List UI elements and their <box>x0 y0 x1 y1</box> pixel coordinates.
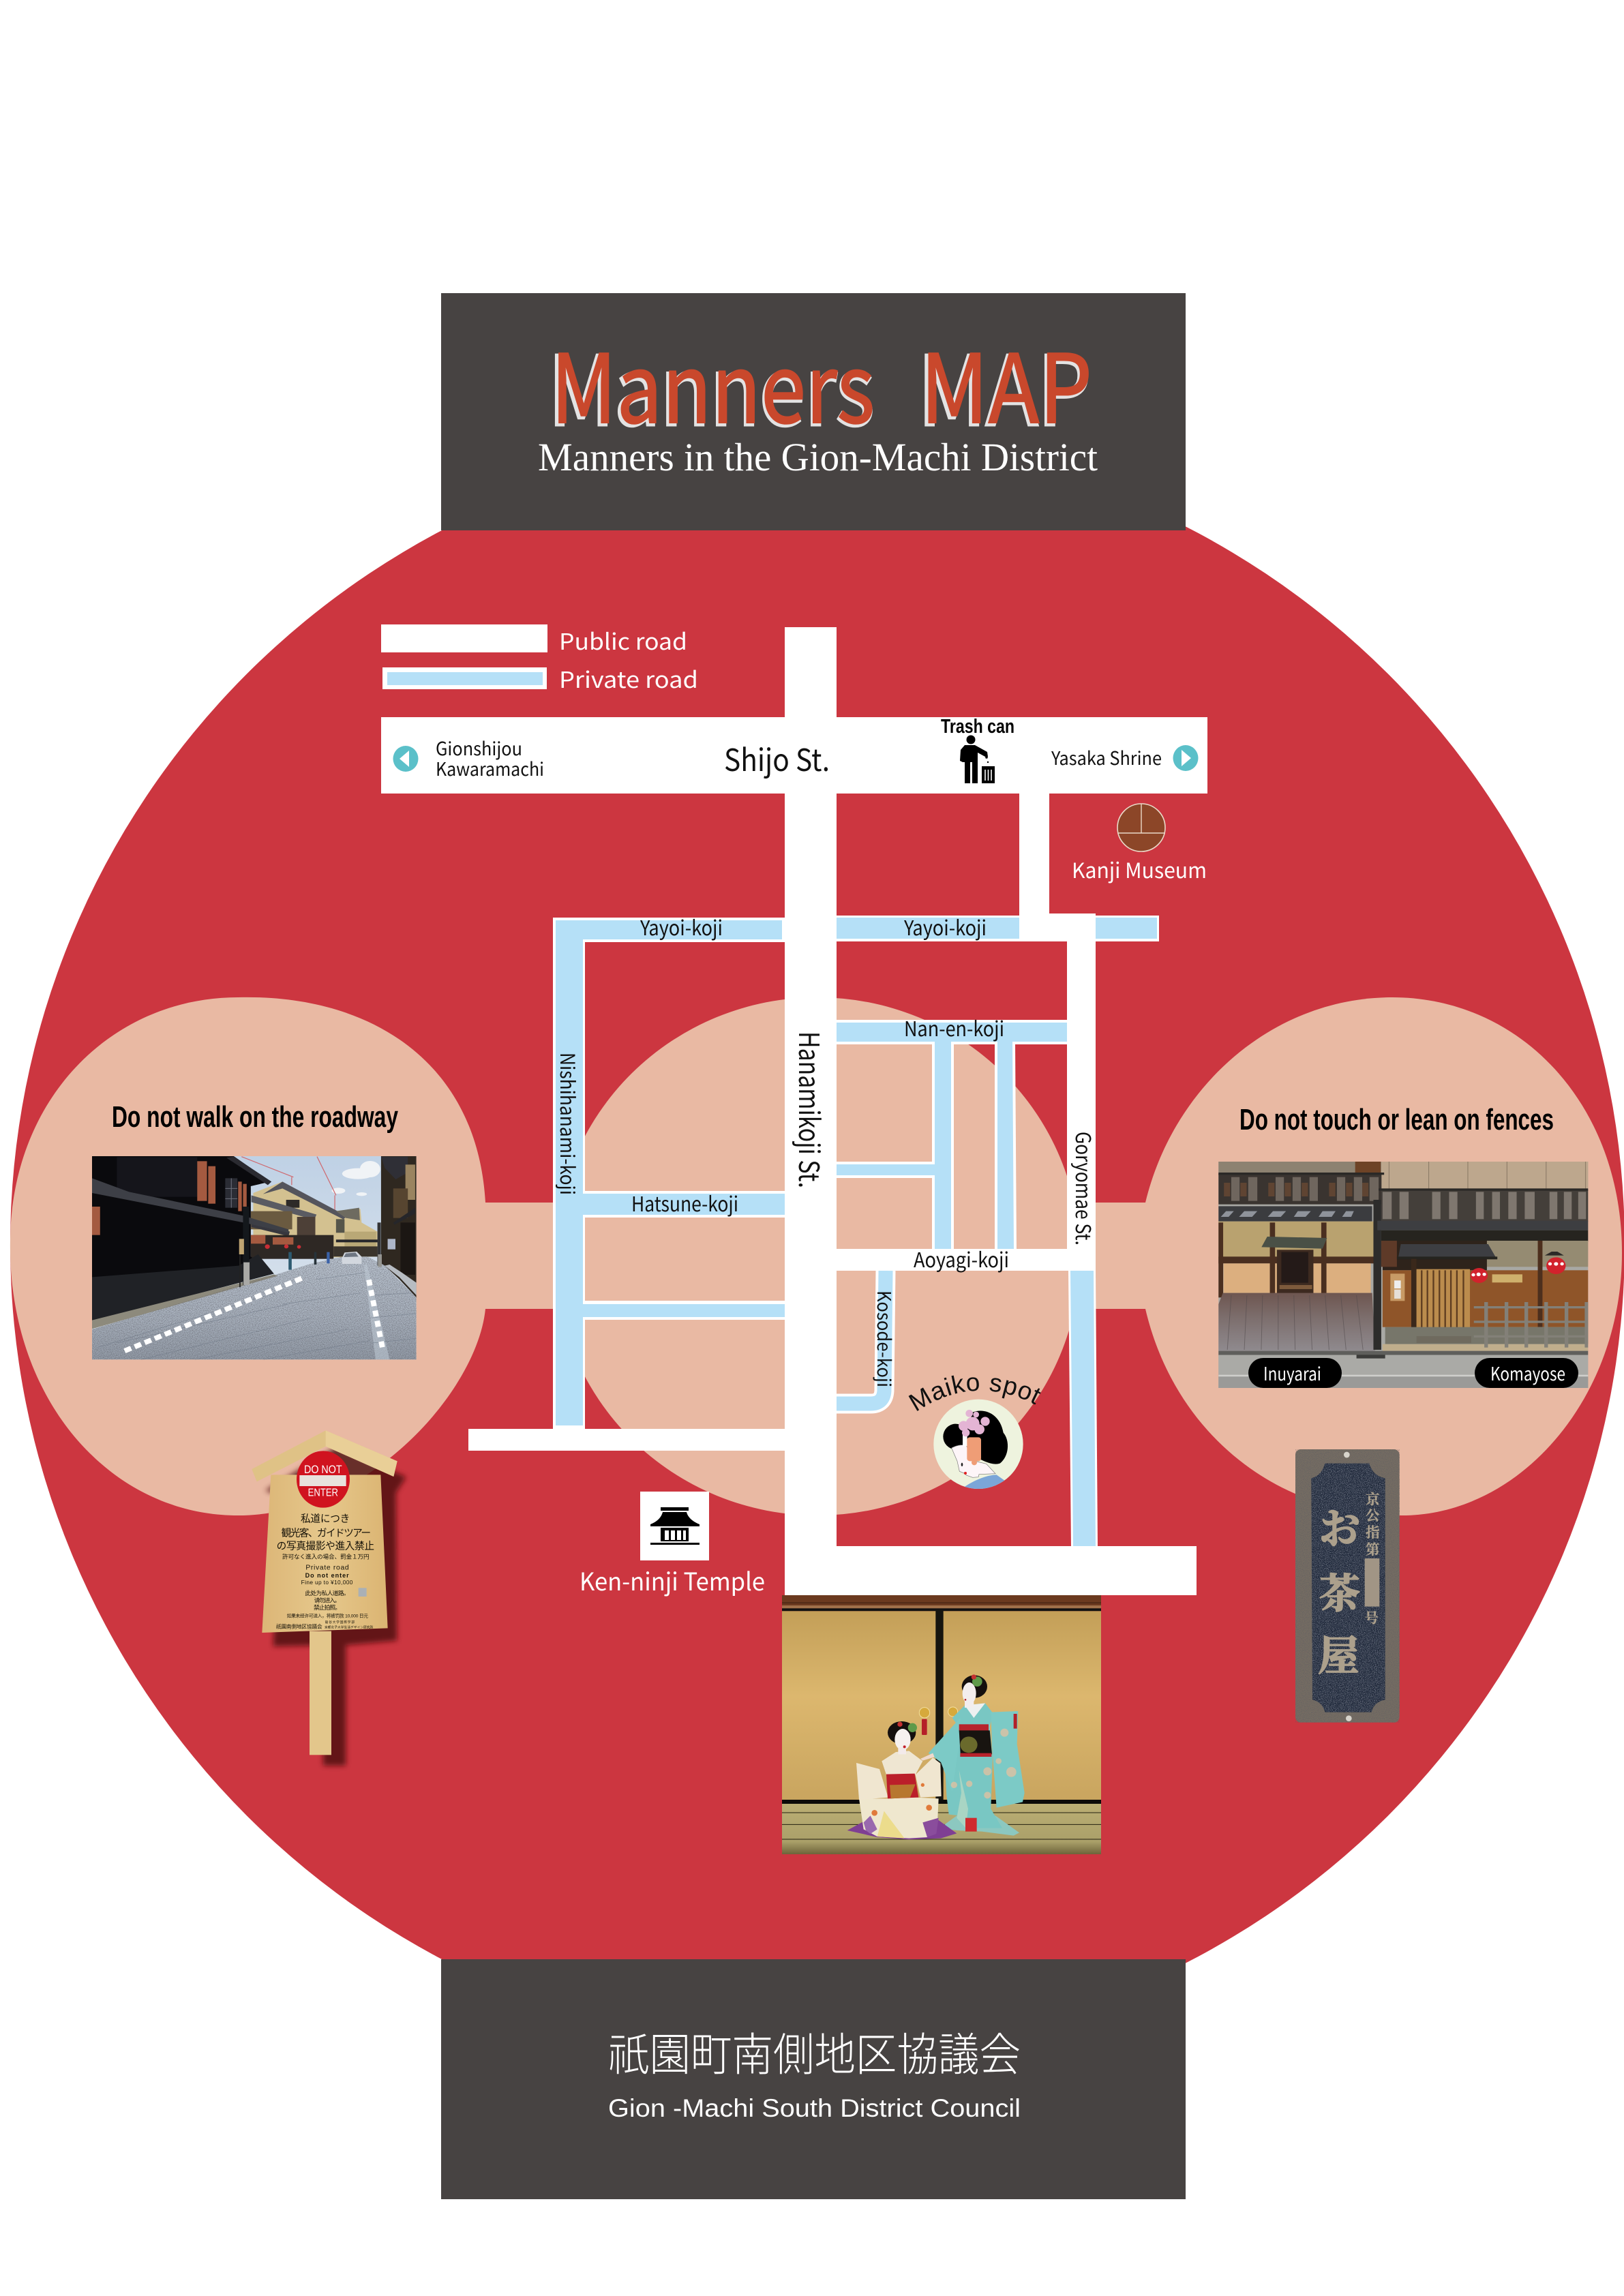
road name labels: Kosode-koji <box>872 1290 899 1387</box>
plaque characters: 号 <box>1364 1607 1379 1627</box>
ochaya plaque <box>1295 1449 1400 1723</box>
Ken-ninji Temple marker: Ken-ninji Temple <box>580 1562 765 1598</box>
wooden Do Not Enter sign: DO NOT <box>304 1463 342 1476</box>
sign notice text: 龍谷大学国際学部 <box>325 1620 355 1625</box>
standing maiko <box>920 1674 1025 1836</box>
road name labels: Yayoi-koji <box>640 911 723 941</box>
red circle background <box>10 438 1624 2052</box>
private roads <box>553 916 1159 1546</box>
icon: left arrow <box>393 746 419 772</box>
heading: Do not walk on the roadway <box>112 1100 398 1134</box>
peach zones and connector <box>10 997 1622 1515</box>
road name labels: Goryomae St. <box>1070 1132 1100 1245</box>
trash can label: Trash can <box>941 716 1014 738</box>
Shijo St label: Shijo St. <box>724 736 830 780</box>
plaque characters: 指 <box>1366 1521 1380 1541</box>
title: MAP <box>918 316 1091 453</box>
road name labels: Hanamikoji St. <box>791 1031 832 1188</box>
title <box>548 314 1092 453</box>
sign notice text: Private road <box>305 1565 349 1572</box>
wooden Do Not Enter sign <box>252 1430 406 1766</box>
Kanji Museum marker <box>1072 804 1207 884</box>
Inuyarai label: Inuyarai <box>1263 1359 1321 1386</box>
icon: right arrow <box>1173 745 1199 771</box>
plaque characters: 茶 <box>1319 1561 1360 1620</box>
sign notice text: 如果未经许可进入，将被罚款 10,000 日元 <box>287 1613 368 1619</box>
plaque characters: 第 <box>1366 1538 1380 1558</box>
road name labels: Hatsune-koji <box>631 1188 738 1218</box>
sign notice text: 許可なく進入の場合、罰金１万円 <box>282 1553 370 1560</box>
seated maiko <box>847 1721 957 1839</box>
road name labels: Aoyagi-koji <box>914 1243 1009 1273</box>
maiko performance photo <box>782 1595 1101 1854</box>
Maiko spot label: Maiko spot <box>908 1376 1040 1411</box>
subtitle: Manners in the Gion-Machi District <box>538 435 1098 479</box>
Gionshijou Kawaramachi label <box>436 734 544 781</box>
sign notice text: Fine up to ¥10,000 <box>301 1579 353 1586</box>
Gionshijou Kawaramachi label: Gionshijou <box>436 734 522 761</box>
plaque characters: お <box>1319 1496 1360 1555</box>
header panel <box>441 293 1186 530</box>
plaque characters: 屋 <box>1318 1624 1359 1682</box>
Maiko spot marker <box>908 1376 1040 1489</box>
road name labels: Nan-en-koji <box>904 1012 1004 1042</box>
plaque characters: 公 <box>1366 1504 1380 1524</box>
Ken-ninji Temple marker <box>580 1492 765 1598</box>
public roads <box>381 627 1207 1595</box>
townhouse photo <box>1218 1162 1588 1388</box>
sign notice text: 観光客、ガイドツアー <box>282 1527 371 1539</box>
wooden Do Not Enter sign: ENTER <box>308 1487 338 1498</box>
sign notice text: の写真撮影や進入禁止 <box>277 1539 374 1552</box>
Gionshijou Kawaramachi label: Kawaramachi <box>436 755 544 781</box>
legend <box>381 624 698 695</box>
sign notice text: 禁止拍照。 <box>314 1603 341 1611</box>
Yasaka Shrine label: Yasaka Shrine <box>1051 744 1162 770</box>
Komayose label: Komayose <box>1490 1359 1565 1386</box>
title: Manners <box>548 316 874 453</box>
road name labels <box>554 911 1100 1387</box>
street labels on Shijo St <box>393 716 1199 783</box>
sign notice text: 此处为私人道路。 <box>305 1589 350 1597</box>
sign notice text: 私道につき <box>301 1513 350 1525</box>
Inuyarai label <box>1248 1358 1342 1388</box>
icon: temple <box>650 1507 700 1545</box>
icon: person with trash can <box>960 735 995 783</box>
title: Manners <box>551 314 875 451</box>
footer panel <box>441 1959 1186 2199</box>
council name in Japanese: 祇園町南側地区協議会 <box>608 2019 1021 2084</box>
Kanji Museum marker: Kanji Museum <box>1072 854 1207 884</box>
council name in English: Gion -Machi South District Council <box>608 2094 1021 2122</box>
sign notice text: 祇園南側地区協議会 <box>276 1622 322 1629</box>
panel: do not touch or lean on fences <box>1218 1103 1588 1388</box>
plaque characters <box>1318 1488 1380 1682</box>
icon: maiko illustration <box>933 1400 1023 1490</box>
panel: do not walk on the roadway <box>92 1100 417 1359</box>
road name labels: Nishihanami-koji <box>554 1053 583 1195</box>
plaque characters: 京 <box>1366 1488 1380 1509</box>
road name labels: Yayoi-koji <box>903 911 987 941</box>
legend: Private road <box>559 662 698 695</box>
sign notice text: 请勿进入。 <box>314 1597 340 1604</box>
sign notice text <box>276 1513 374 1629</box>
legend: Public road <box>559 624 687 656</box>
sign notice text: Do not enter <box>305 1572 349 1579</box>
sign notice text: 京都女子大学生活デザイン研究所 <box>325 1625 374 1629</box>
street photo <box>92 1156 417 1359</box>
title: MAP <box>920 314 1092 451</box>
